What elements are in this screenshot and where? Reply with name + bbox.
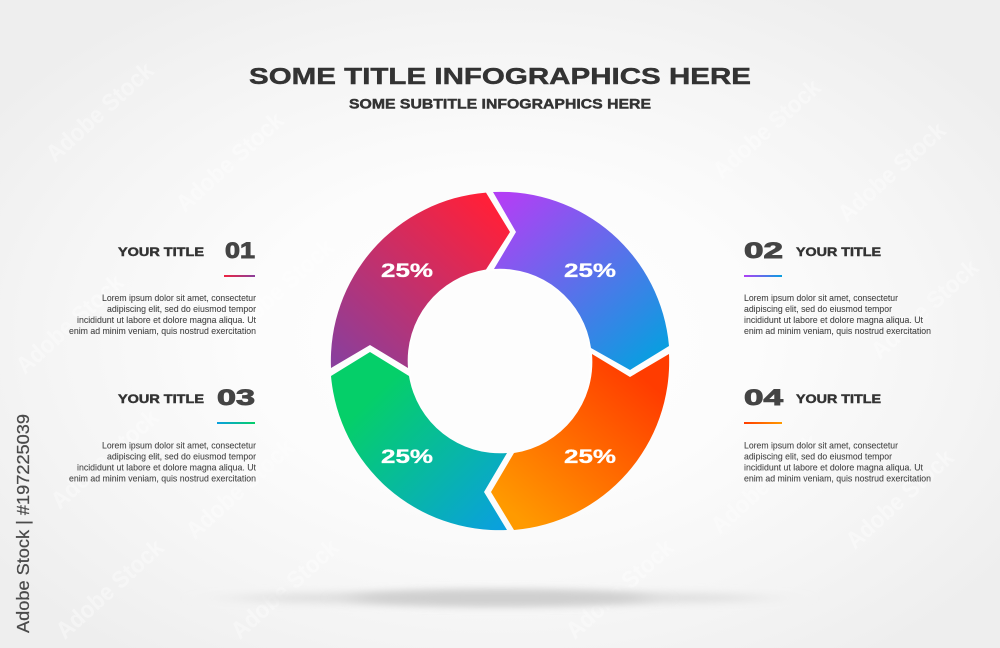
text: Adobe Stock: [11, 269, 130, 380]
item 03 heading: YOUR TITLE: [118, 394, 204, 406]
item 01 heading: YOUR TITLE: [118, 247, 204, 259]
text: Adobe Stock: [706, 429, 825, 540]
text: Adobe Stock: [226, 534, 345, 645]
item 02 body text: incididunt ut labore et dolore magna aliqua. Ut: [744, 315, 923, 325]
item 04 body text: [744, 440, 931, 484]
item 02 body text: Lorem ipsum dolor sit amet, consectetur: [744, 293, 898, 303]
item 04 body text: adipiscing elit, sed do eiusmod tempor: [744, 452, 892, 462]
segment 03: green to blue: [331, 352, 507, 530]
item 02 body text: adipiscing elit, sed do eiusmod tempor: [744, 304, 892, 314]
text: Adobe Stock: [708, 74, 827, 185]
segment 04 value: 25%: [564, 447, 616, 468]
subtitle: SOME SUBTITLE INFOGRAPHICS HERE: [349, 96, 651, 112]
text: Adobe Stock: [51, 534, 170, 645]
item 04 number: 04: [744, 385, 784, 410]
segment 04: orange: [491, 354, 669, 530]
item 03 body text: Lorem ipsum dolor sit amet, consectetur: [102, 440, 256, 450]
item 03 body text: enim ad minim veniam, quis nostrud exercitation: [69, 474, 256, 484]
text: Adobe Stock: [41, 57, 160, 168]
donut chart: [331, 192, 669, 530]
item 03 body text: adipiscing elit, sed do eiusmod tempor: [107, 452, 256, 462]
text: Adobe Stock: [46, 404, 165, 515]
item 02 accent line: [744, 275, 782, 277]
item 04 body text: enim ad minim veniam, quis nostrud exercitation: [744, 474, 931, 484]
text: Adobe Stock: [841, 444, 960, 555]
item 04 heading: YOUR TITLE: [796, 394, 881, 406]
item 01 body text: [69, 293, 256, 336]
text: Adobe Stock: [561, 534, 680, 645]
segment 01: red: [331, 193, 510, 368]
item 03 body text: incididunt ut labore et dolore magna aliqua. Ut: [77, 462, 256, 472]
panel: item 02: [744, 238, 931, 336]
text: Adobe Stock: [866, 254, 985, 365]
item 01 body text: Lorem ipsum dolor sit amet, consectetur: [102, 293, 256, 303]
item 03 number: 03: [217, 385, 255, 410]
title: SOME TITLE INFOGRAPHICS HERE: [249, 63, 751, 89]
text: Adobe Stock: [171, 107, 290, 218]
segment 01 value: 25%: [381, 261, 433, 282]
item 01 accent line: [224, 275, 255, 277]
center circle: [410, 271, 590, 451]
item 01 number: 01: [225, 238, 255, 263]
item 02 heading: YOUR TITLE: [796, 247, 881, 259]
floor shadow: [230, 590, 770, 606]
item 04 body text: incididunt ut labore et dolore magna aliqua. Ut: [744, 462, 923, 472]
item 03 accent line: [217, 422, 255, 424]
text: Adobe Stock: [833, 117, 952, 228]
item 02 body text: enim ad minim veniam, quis nostrud exercitation: [744, 326, 931, 336]
segment 02 value: 25%: [564, 261, 616, 282]
item 02 number: 02: [744, 238, 783, 263]
item 02 body text: [744, 293, 931, 336]
panel: item 01: [69, 238, 256, 336]
panel: item 03: [69, 385, 256, 484]
item 01 body text: adipiscing elit, sed do eiusmod tempor: [107, 304, 256, 314]
item 03 body text: [69, 440, 256, 484]
segment 03 value: 25%: [381, 447, 433, 468]
text: Adobe Stock: [221, 234, 340, 345]
item 01 body text: incididunt ut labore et dolore magna aliqua. Ut: [77, 315, 256, 325]
text: Adobe Stock: [181, 434, 300, 545]
segment 02: purple to blue: [493, 192, 669, 370]
stock credit: Adobe Stock | #197225039: [13, 414, 33, 633]
panel: item 04: [744, 385, 931, 484]
item 01 body text: enim ad minim veniam, quis nostrud exercitation: [69, 326, 256, 336]
item 04 body text: Lorem ipsum dolor sit amet, consectetur: [744, 440, 898, 450]
item 04 accent line: [744, 422, 782, 424]
